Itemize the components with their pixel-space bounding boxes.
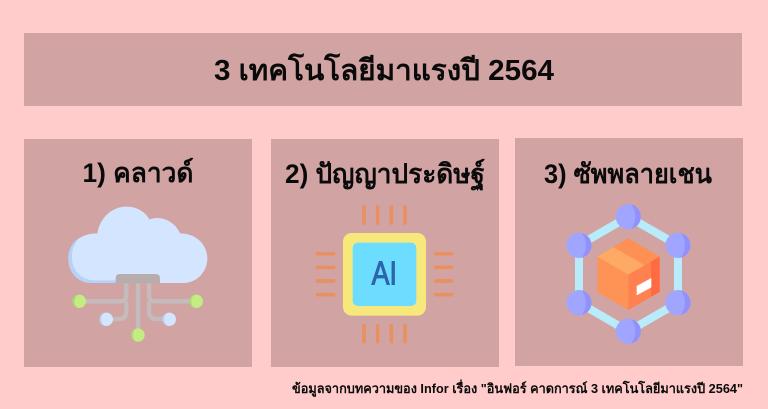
icon: supply chain package [566,204,691,344]
panel: artificial intelligence [271,139,499,367]
icon: AI chip [317,207,452,342]
heading: cloud: 1) คลาวด์ [82,157,194,188]
panel: cloud [24,139,252,367]
title banner [24,33,742,106]
heading: artificial intelligence: 2) ปัญญาประดิษฐ์ [285,158,485,192]
source note: ข้อมูลจากบทความของ Infor เรื่อง "อินฟอร์ คาดการณ์ 3 เทคโนโลยีมาแรงปี 2564" [292,379,743,397]
icon: cloud network [68,207,207,342]
label: AI: AI [372,256,397,293]
panel: supply chain [515,138,743,366]
title: 3 เทคโนโลยีมาแรงปี 2564 [214,52,554,87]
heading: supply chain: 3) ซัพพลายเชน [544,159,713,189]
